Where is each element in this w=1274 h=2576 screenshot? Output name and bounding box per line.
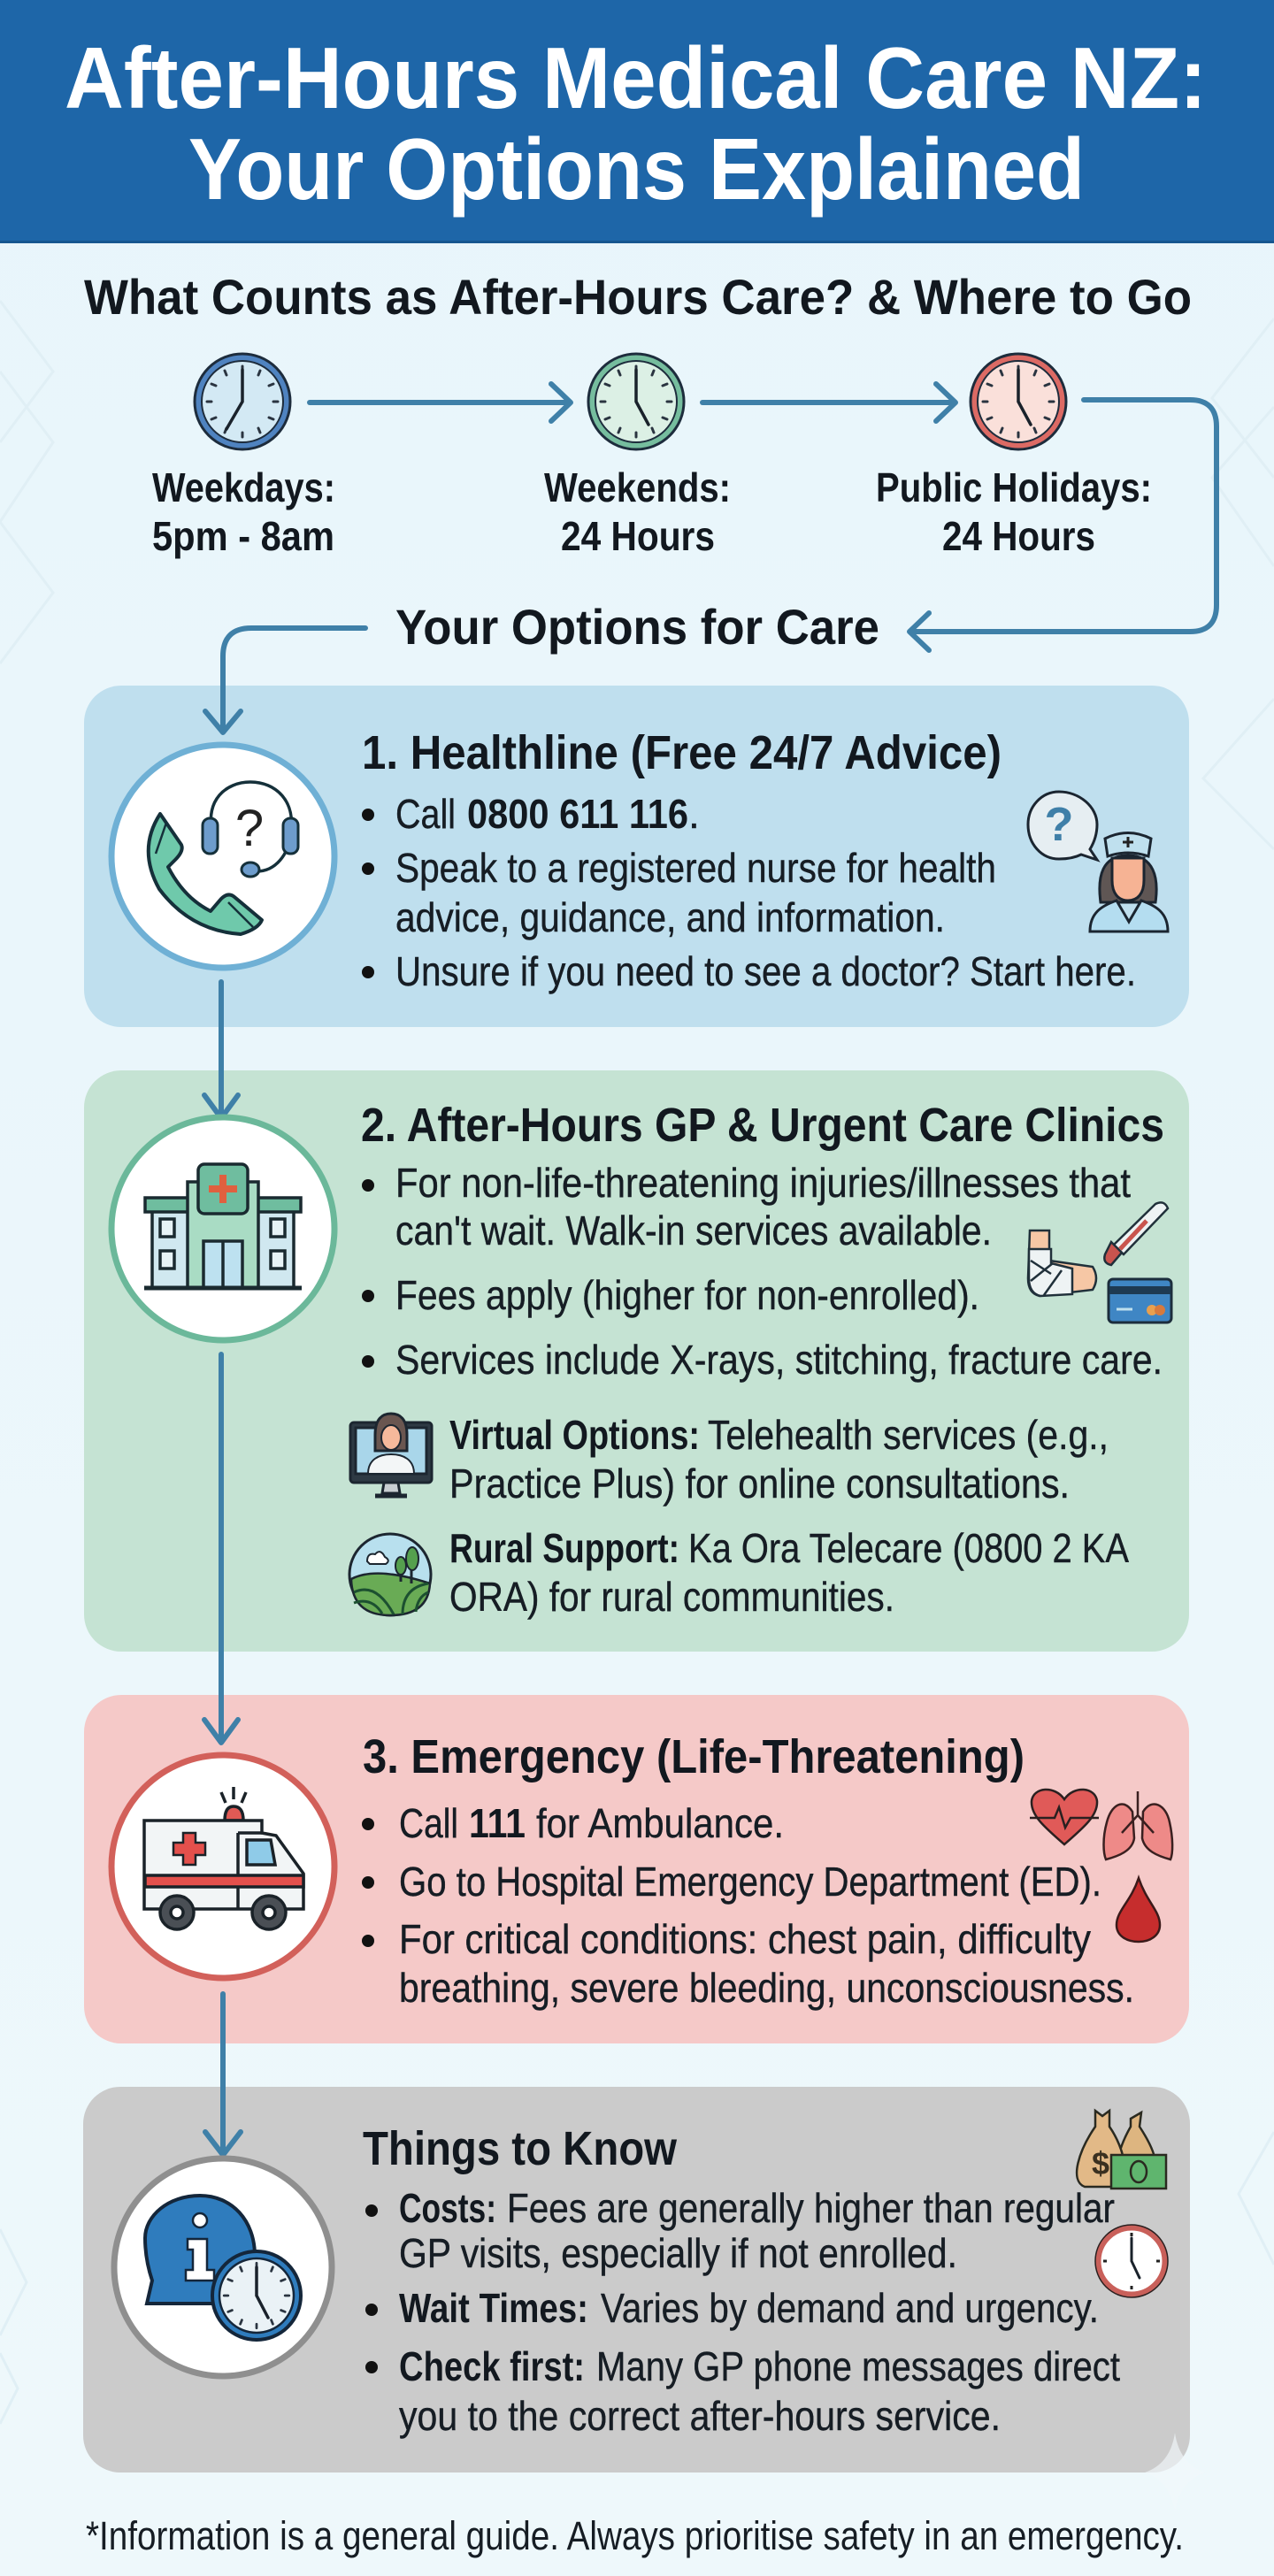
healthline bullets: advice, guidance, and information. bbox=[395, 894, 945, 940]
heading: GP clinics: 2. After-Hours GP & Urgent Care Clinics bbox=[361, 1099, 1164, 1152]
heading: emergency: 3. Emergency (Life-Threatening) bbox=[363, 1730, 1025, 1783]
icon: lungs bbox=[1104, 1791, 1172, 1859]
things to know bullets: Check first: bbox=[399, 2343, 585, 2389]
label: public holidays: Public Holidays: bbox=[876, 464, 1152, 510]
heading: your options for care: Your Options for Care bbox=[395, 599, 879, 655]
emergency bullets: breathing, severe bleeding, unconsciousness. bbox=[399, 1965, 1134, 2011]
label: weekdays: Weekdays: bbox=[152, 464, 335, 510]
icon: weekdays clock bbox=[195, 354, 290, 449]
virtual options text: Telehealth services (e.g., bbox=[708, 1412, 1109, 1458]
emergency bullets: for Ambulance. bbox=[536, 1800, 784, 1846]
header banner bbox=[0, 0, 1274, 243]
icon: rural landscape bbox=[349, 1534, 431, 1615]
healthline bullets: Speak to a registered nurse for health bbox=[395, 845, 996, 891]
connector: GP to emergency bbox=[204, 1354, 238, 1743]
emergency bullets: Call bbox=[399, 1800, 458, 1846]
info bubble bbox=[145, 2196, 255, 2304]
info clock bbox=[212, 2251, 301, 2340]
rural support text: Ka Ora Telecare (0800 2 KA bbox=[688, 1525, 1129, 1571]
label: weekdays: 5pm - 8am bbox=[152, 513, 334, 559]
things to know bullets: Costs: bbox=[399, 2185, 496, 2231]
label: weekends bbox=[544, 464, 731, 559]
icon: nurse with question bubble: ? bbox=[1044, 798, 1074, 851]
healthline bullets: Call bbox=[395, 791, 456, 837]
label: weekdays bbox=[152, 464, 335, 559]
headset with question mark bbox=[203, 782, 298, 877]
healthline bullets: . bbox=[688, 791, 700, 837]
hospital building bbox=[144, 1164, 302, 1288]
icon: credit card bbox=[1109, 1279, 1171, 1322]
things to know bullets: Varies by demand and urgency. bbox=[601, 2285, 1099, 2331]
connector: healthline to GP bbox=[204, 982, 238, 1118]
connector: emergency to things to know bbox=[205, 1994, 241, 2155]
things to know bullets: GP visits, especially if not enrolled. bbox=[399, 2230, 957, 2276]
icon: hospital circle bbox=[111, 1117, 334, 1340]
panel: healthline bbox=[84, 686, 1189, 1027]
title bbox=[65, 29, 1207, 218]
emergency bullets: For critical conditions: chest pain, difficulty bbox=[399, 1916, 1091, 1962]
arrow: weekdays to weekends bbox=[310, 384, 571, 421]
GP bullets: Services include X-rays, stitching, fracture care. bbox=[395, 1337, 1163, 1383]
heading: healthline: 1. Healthline (Free 24/7 Advice) bbox=[362, 726, 1002, 779]
decoration: sparkle bbox=[1145, 2433, 1205, 2512]
icon: heart bbox=[1030, 1790, 1099, 1844]
emergency bullets bbox=[362, 1800, 1134, 2011]
panel: emergency bbox=[84, 1695, 1189, 2043]
things to know bullets: Fees are generally higher than regular bbox=[507, 2185, 1115, 2231]
label: weekends: 24 Hours bbox=[561, 513, 715, 559]
healthline bullets bbox=[362, 791, 1136, 994]
things to know bullets bbox=[365, 2185, 1120, 2439]
icon: healthline circle bbox=[111, 745, 334, 968]
rural support text bbox=[449, 1525, 1129, 1620]
headset with question mark: ? bbox=[235, 800, 264, 857]
icon: money bags: $ bbox=[1092, 2145, 1109, 2181]
arrow: weekends to holidays bbox=[702, 384, 956, 421]
phone handset bbox=[149, 814, 262, 934]
panel: after-hours GP bbox=[84, 1070, 1189, 1652]
GP bullets: For non-life-threatening injuries/illnesses that bbox=[395, 1160, 1131, 1206]
icon: nurse with question bubble bbox=[1028, 792, 1168, 932]
arrow: options to healthline bbox=[205, 628, 365, 732]
subtitle: What Counts as After-Hours Care? & Where to Go bbox=[84, 269, 1192, 325]
rural support text: ORA) for rural communities. bbox=[449, 1574, 894, 1620]
icon: money bags bbox=[1077, 2111, 1166, 2189]
things to know bullets: you to the correct after-hours service. bbox=[399, 2393, 1001, 2439]
label: weekends: Weekends: bbox=[544, 464, 731, 510]
icon: info and clock circle bbox=[114, 2158, 332, 2376]
icon: bandaged arm bbox=[1028, 1230, 1096, 1296]
healthline bullets: Unsure if you need to see a doctor? Start here. bbox=[395, 948, 1136, 994]
GP bullets bbox=[362, 1160, 1163, 1383]
heading: things to know: Things to Know bbox=[363, 2122, 678, 2175]
icon: weekends clock bbox=[588, 354, 684, 449]
ambulance bbox=[144, 1787, 303, 1929]
label: public holidays bbox=[876, 464, 1152, 559]
label: public holidays: 24 Hours bbox=[942, 513, 1095, 559]
icon: telehealth monitor bbox=[350, 1414, 432, 1496]
virtual options text bbox=[449, 1412, 1109, 1506]
GP bullets: Fees apply (higher for non-enrolled). bbox=[395, 1272, 979, 1318]
GP bullets: can't wait. Walk-in services available. bbox=[395, 1208, 992, 1254]
emergency bullets: Go to Hospital Emergency Department (ED). bbox=[399, 1859, 1101, 1905]
rural support text: Rural Support: bbox=[449, 1525, 679, 1571]
things to know bullets: Many GP phone messages direct bbox=[596, 2343, 1120, 2389]
emergency bullets: 111 bbox=[469, 1800, 526, 1846]
icon: ambulance circle bbox=[111, 1755, 334, 1978]
title: After-Hours Medical Care NZ: bbox=[65, 29, 1207, 126]
icon: thermometer bbox=[1104, 1202, 1168, 1265]
arrow: holidays to options bbox=[909, 400, 1216, 650]
panel: things to know bbox=[83, 2087, 1190, 2472]
icon: blood drop bbox=[1117, 1878, 1160, 1942]
virtual options text: Virtual Options: bbox=[449, 1412, 700, 1458]
icon: red clock bbox=[1095, 2225, 1168, 2297]
virtual options text: Practice Plus) for online consultations. bbox=[449, 1460, 1070, 1506]
healthline bullets: 0800 611 116 bbox=[467, 791, 688, 837]
title: Your Options Explained bbox=[188, 120, 1085, 218]
things to know bullets: Wait Times: bbox=[399, 2285, 588, 2331]
icon: public holidays clock bbox=[971, 354, 1066, 449]
